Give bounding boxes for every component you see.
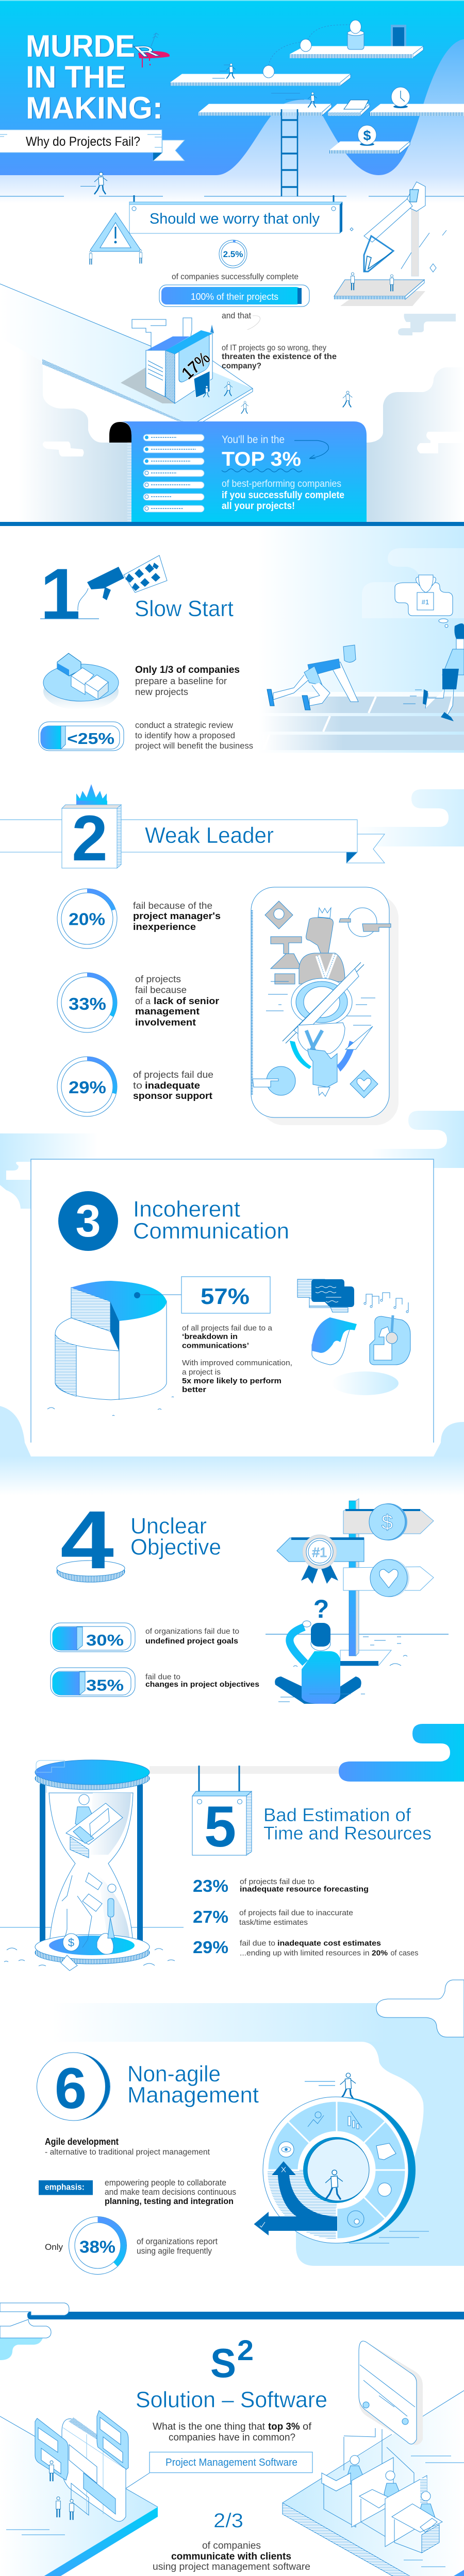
illustration: king playing card: [251, 887, 399, 1125]
checklist: [143, 434, 204, 512]
title: MURDE: [26, 29, 135, 63]
text: 35% caption: [145, 1672, 259, 1689]
stat: 29%: inadequate cost estimates: [277, 1939, 381, 1947]
stat: 29%: fail due to: [240, 1939, 275, 1947]
heading: Slow Start: Slow Start: [135, 596, 234, 621]
chat bubbles: [35, 2411, 128, 2480]
subtitle banner: [0, 130, 185, 161]
text: agile development: - alternative to traditional project management: [45, 2148, 210, 2157]
middle platform: [170, 63, 351, 86]
question text: of: [303, 2421, 312, 2432]
crowned number 2: [62, 784, 121, 874]
heading ribbon: weak leader: [0, 819, 385, 863]
label box: project management software: [150, 2452, 312, 2473]
text: emphasis description: planning, testing and integration: [105, 2196, 234, 2206]
panel: top 3% scroll: You'll be in the: [222, 434, 285, 446]
text: 33% caption: of projects: [135, 974, 181, 984]
heading: unclear objective: [130, 1514, 221, 1560]
text: communication stats: 5x more likely to perform: [182, 1377, 281, 1385]
text: strategic review: to identify how a proposed: [135, 731, 235, 740]
heading: solution: Solution – Software: [136, 2387, 327, 2412]
pill: less than 25%: [39, 722, 124, 751]
stat: 27%: task/time estimates: [239, 1918, 308, 1927]
number 1 with starter pistol and flag: 1: [40, 553, 80, 634]
text: communication stats: With improved communication,: [182, 1359, 292, 1367]
text: 38% caption: of organizations report: [137, 2236, 218, 2246]
illustration: signpost with confused person: ?: [313, 1595, 329, 1623]
sign: dollar: $: [382, 1511, 393, 1534]
text: and that with curved arrow: [222, 311, 260, 339]
illustration: burning building on slab: 17%: [178, 348, 214, 383]
heading: non-agile management: Management: [127, 2082, 259, 2108]
running figure on ground: [80, 172, 107, 194]
number 4 on disc: [57, 1494, 125, 1586]
hatched wedge: [268, 2170, 337, 2239]
king lower half: [290, 1023, 373, 1096]
title: MAKING:: [26, 91, 163, 125]
thought bubble with trophy: #1: [422, 598, 429, 606]
icon: warning triangle carried by two people: [89, 213, 142, 264]
text: 30% caption: [145, 1627, 239, 1646]
illustration: signpost with confused person: [266, 1499, 449, 1704]
stat ring: 29%: 29%: [69, 1078, 106, 1097]
stat ring: 38%: [45, 2216, 127, 2274]
text: 29% caption: sponsor support: [133, 1091, 212, 1101]
icon: checkered flag: [124, 555, 167, 592]
pill: 100% of their projects: 100% of their projects: [191, 292, 278, 302]
title: [26, 29, 163, 125]
text: of companies: of companies successfully complete: [172, 273, 299, 281]
stat: 2/3: 2/3: [213, 2510, 243, 2532]
text: 33% caption: of a: [135, 996, 151, 1006]
lower platforms: $: [363, 128, 371, 143]
heading ribbon: weak leader: Weak Leader: [145, 823, 274, 848]
text: Only 1/3 of companies: new projects: [135, 687, 188, 697]
stat ring: 33%: 33%: [69, 994, 106, 1013]
sign: should we worry: Should we worry that only: [150, 211, 320, 227]
illustration: burning building on slab: [0, 284, 352, 423]
text: 29% caption: [133, 1070, 213, 1101]
illustration: crane: [334, 182, 446, 306]
number badge 3: [58, 1191, 118, 1251]
cubicle 1: [322, 2455, 364, 2527]
text: agile development: Agile development: [45, 2137, 119, 2147]
text: IT projects: threaten the existence of the: [222, 352, 337, 361]
heading: Incoherent: [133, 1196, 240, 1222]
thought bubble with trophy: [395, 575, 453, 628]
wheel sectors: [268, 2101, 406, 2239]
stat: 27%: of projects fail due to inaccurate: [239, 1908, 353, 1918]
pie cylinder chart: [55, 1281, 181, 1400]
text: agile development: [45, 2137, 210, 2157]
lower platforms: [198, 87, 464, 154]
text: communication stats: better: [182, 1385, 206, 1394]
label box: project management software: Project Management Software: [165, 2457, 297, 2468]
icon: crown: [76, 784, 107, 806]
heading: unclear objective: Objective: [130, 1534, 221, 1560]
text: 20% caption: fail because of the: [133, 901, 212, 911]
cubicle 3: [385, 2476, 442, 2553]
stat: 23%: 23%: [193, 1876, 228, 1895]
text: IT projects: of IT projects go so wrong, they: [222, 344, 326, 352]
hanging calendar number 5: [192, 1766, 252, 1859]
text: strategic review: [135, 720, 253, 751]
stat box: 57%: [181, 1277, 270, 1313]
sprinting runner: [403, 623, 464, 721]
text: strategic review: conduct a strategic review: [135, 720, 234, 730]
icon: starter pistol: [78, 567, 124, 611]
illustration: right slab with cubicles and phone: [283, 2341, 464, 2576]
text: 29% caption: inadequate: [145, 1080, 200, 1091]
decorative waves: [47, 1397, 174, 1416]
text: IT projects: company?: [222, 362, 261, 370]
label: emphasis: emphasis:: [45, 2182, 85, 2192]
ladder: [281, 109, 297, 196]
sign: should we worry: [129, 195, 342, 233]
panel: top 3% scroll: all your projects!: [222, 501, 295, 512]
man at desk: [66, 1794, 123, 1858]
text: 20% caption: [133, 901, 221, 932]
floating platforms: [170, 20, 464, 154]
text: 33% caption: fail because: [135, 985, 187, 995]
heading: non-agile management: [127, 2061, 259, 2108]
background: section 5 bar and cloud: [150, 1724, 464, 1782]
background cloud: section 3: [0, 1111, 464, 1495]
fallen letter R with arrow and blood splash: R: [129, 43, 163, 60]
solution icon: S squared: 2: [237, 2334, 254, 2366]
section divider: [0, 522, 464, 526]
2.5% ring: 2.5%: [223, 249, 243, 259]
top platform with door and jar: [290, 20, 423, 58]
crouching runner: [267, 645, 358, 710]
text: 33% caption: management: [135, 1006, 200, 1016]
illustration: runners and thought bubble: [267, 575, 464, 721]
text: emphasis description: and make team decisions continuous: [105, 2187, 236, 2197]
illustration: speech bubbles, notes and heads: [297, 1279, 410, 1395]
falling objects: $: [68, 1936, 74, 1949]
post: [349, 1499, 359, 1656]
stat: 29%: 20%: [372, 1948, 388, 1958]
stat: 29%: 29%: [193, 1938, 228, 1957]
slab: [0, 284, 253, 423]
question text: What is the one thing that: [153, 2421, 266, 2432]
arrow: [254, 2161, 337, 2235]
text: Only 1/3 of companies: prepare a baseline for: [135, 676, 227, 686]
text: 29% caption: to: [133, 1080, 142, 1091]
question text: companies have in common?: [169, 2432, 295, 2443]
text: IT projects: [222, 344, 337, 370]
pill: 35%: 35%: [86, 1676, 124, 1694]
sign: dollar: [343, 1503, 434, 1540]
text: emphasis description: [105, 2178, 236, 2206]
text: 30% caption: undefined project goals: [145, 1637, 238, 1646]
heading: bad estimation: Bad Estimation of: [263, 1804, 411, 1825]
pill: less than 25%: <25%: [67, 730, 114, 748]
stat: 29%: ...ending up with limited resources in: [240, 1948, 369, 1958]
text: 35% caption: fail due to: [145, 1672, 180, 1682]
text: and that with curved arrow: and that: [222, 311, 251, 320]
panel: top 3% scroll: TOP 3%: [222, 448, 301, 470]
stat box: 57%: 57%: [201, 1284, 250, 1309]
text: communication stats: ‘breakdown in: [182, 1332, 238, 1341]
text: 30% caption: of organizations fail due to: [145, 1627, 239, 1636]
panel: top 3% scroll: of best-performing companies: [222, 479, 341, 489]
background: section 1 track and gradient: [258, 526, 464, 753]
cubicle 2: [352, 2458, 401, 2537]
text: 29% caption: of projects fail due: [133, 1070, 213, 1080]
stat: 27%: 27%: [193, 1907, 228, 1926]
number 4 on disc: 4: [60, 1494, 114, 1586]
sector icons: [278, 2111, 396, 2227]
stat: 2/3: communicate with clients: [171, 2551, 291, 2562]
panel: incoherent communication card: [31, 1159, 434, 1456]
text: 33% caption: [135, 974, 219, 1027]
stat: 2/3: of companies: [202, 2540, 261, 2551]
panel: top 3% scroll: [109, 421, 367, 522]
illustration: agile wheel with runners: [254, 2073, 429, 2243]
question text: [153, 2421, 312, 2443]
stat: 23%: inadequate resource forecasting: [240, 1885, 369, 1894]
icon: heart diamond: [350, 1070, 378, 1098]
crowned number 2: 2: [72, 803, 108, 874]
heading: bad estimation: [263, 1804, 432, 1843]
text: communication stats: communications’: [182, 1342, 249, 1350]
label: emphasis: [39, 2180, 93, 2195]
pill: 100% of their projects: [159, 285, 309, 307]
stat ring: 38%: 38%: [79, 2237, 115, 2257]
king upper half: [271, 908, 345, 984]
text: emphasis description: empowering people to collaborate: [105, 2178, 226, 2188]
pill: 30%: 30%: [86, 1631, 124, 1649]
stat ring: 20%: [57, 889, 117, 948]
number 6 ring: [37, 2053, 110, 2121]
stat ring: 29%: [57, 1057, 117, 1116]
text: 38% caption: using agile frequently: [137, 2246, 212, 2256]
solution icon: S squared: [210, 2334, 254, 2386]
text: communication stats: of all projects fail due to a: [182, 1324, 273, 1332]
text: 33% caption: lack of senior: [154, 996, 219, 1006]
background cloud behind burning building: [0, 314, 464, 522]
title: IN THE: [26, 60, 126, 94]
smoke: [36, 1760, 64, 1793]
text: 38% caption: [137, 2236, 218, 2256]
phone: [359, 2341, 423, 2445]
sign: number one rosette: #1: [312, 1545, 327, 1560]
heading: non-agile management: Non-agile: [127, 2061, 221, 2087]
background cloud: section 2: [357, 789, 464, 846]
text: 20% caption: project manager's: [133, 911, 221, 921]
subtitle banner: Why do Projects Fail?: [26, 134, 140, 149]
sign: number one rosette: [277, 1535, 364, 1584]
text: Only 1/3 of companies: [135, 665, 240, 697]
stat: 29%: [193, 1938, 419, 1958]
stat: 2/3: using project management software: [153, 2562, 310, 2572]
panel: top 3% scroll: if you successfully complete: [222, 490, 344, 501]
pill: 30%: [51, 1623, 135, 1652]
text: 35% caption: changes in project objectives: [145, 1680, 259, 1689]
smoke pipes: [132, 318, 192, 350]
text: 33% caption: involvement: [135, 1017, 196, 1027]
text: Only 1/3 of companies: Only 1/3 of companies: [135, 665, 240, 675]
sign: heart: [343, 1559, 434, 1597]
heading: bad estimation: Time and Resources: [263, 1823, 432, 1843]
fallen letter R with arrow and blood splash: [129, 33, 170, 67]
hero background: sky and hills: [0, 0, 464, 204]
heading: unclear objective: Unclear: [130, 1514, 207, 1538]
text: strategic review: project will benefit the business: [135, 741, 253, 751]
number 1 with starter pistol and flag: [40, 553, 167, 634]
icon: disc with buildings: [43, 653, 119, 710]
number 6 ring: 6: [55, 2056, 87, 2121]
stat: 23%: of projects fail due to: [240, 1877, 314, 1886]
solution divider: [0, 2303, 464, 2360]
illustration: left slab with project board: [0, 2411, 158, 2576]
question text: top 3%: [268, 2421, 300, 2432]
solution icon: S squared: S: [210, 2340, 236, 2386]
text: communication stats: [182, 1324, 292, 1394]
pill: 35%: [51, 1668, 135, 1697]
stat: 29%: of cases: [391, 1948, 419, 1958]
number badge 3: 3: [76, 1195, 101, 1246]
hanging calendar number 5: 5: [204, 1794, 236, 1859]
falling objects: [61, 1873, 116, 1971]
heading: Communication: [133, 1218, 289, 1244]
text: 20% caption: inexperience: [133, 922, 196, 932]
heading: [133, 1196, 289, 1244]
stat ring: 33%: [57, 973, 117, 1032]
stat ring: 38%: Only: [45, 2242, 63, 2252]
illustration: hourglass: [0, 1760, 184, 1971]
stat: 23%: [193, 1876, 369, 1895]
text: communication stats: a project is: [182, 1368, 221, 1377]
stat ring: 20%: 20%: [69, 910, 105, 928]
stat: 2/3: [153, 2510, 310, 2572]
stat: 27%: [193, 1907, 353, 1927]
person thinking: [275, 1621, 361, 1704]
background cloud: section 6: [52, 1980, 464, 2266]
2.5% ring: [219, 240, 247, 268]
icon: skull diamond: [265, 901, 293, 929]
